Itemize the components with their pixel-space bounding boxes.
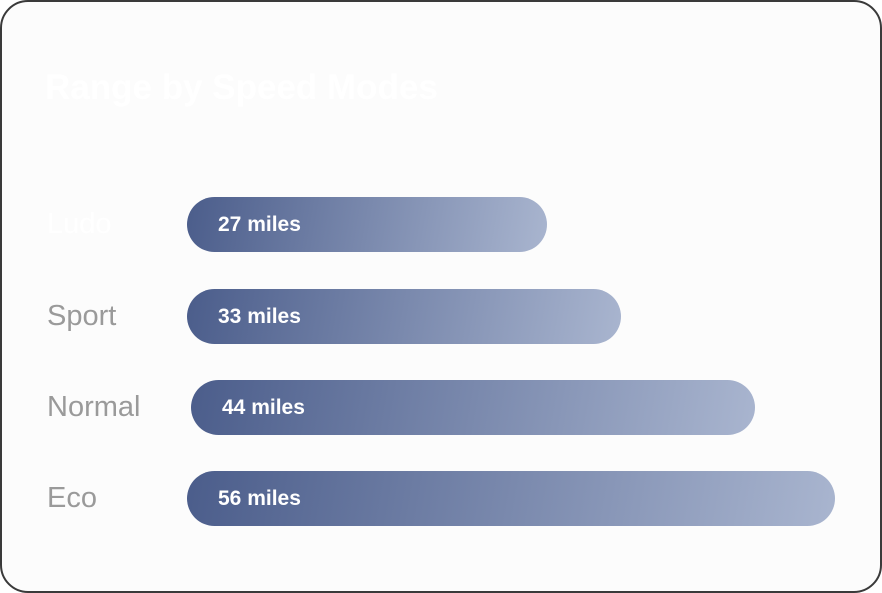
label: Sport: Sport [47, 300, 116, 332]
bar: Ludo [187, 197, 547, 252]
bar: Ludo: 27 miles [218, 213, 301, 236]
bar: Sport: 33 miles [218, 305, 301, 328]
bar: Eco [187, 471, 835, 526]
bar: Normal [191, 380, 755, 435]
label: Ludo: Ludo [47, 208, 112, 240]
label: Eco: Eco [47, 482, 97, 514]
bar: Eco: 56 miles [218, 487, 301, 510]
title: Range by Speed Modes [45, 68, 438, 107]
label: Normal: Normal [47, 391, 140, 423]
bar: Normal: 44 miles [222, 396, 305, 419]
bar: Sport [187, 289, 621, 344]
